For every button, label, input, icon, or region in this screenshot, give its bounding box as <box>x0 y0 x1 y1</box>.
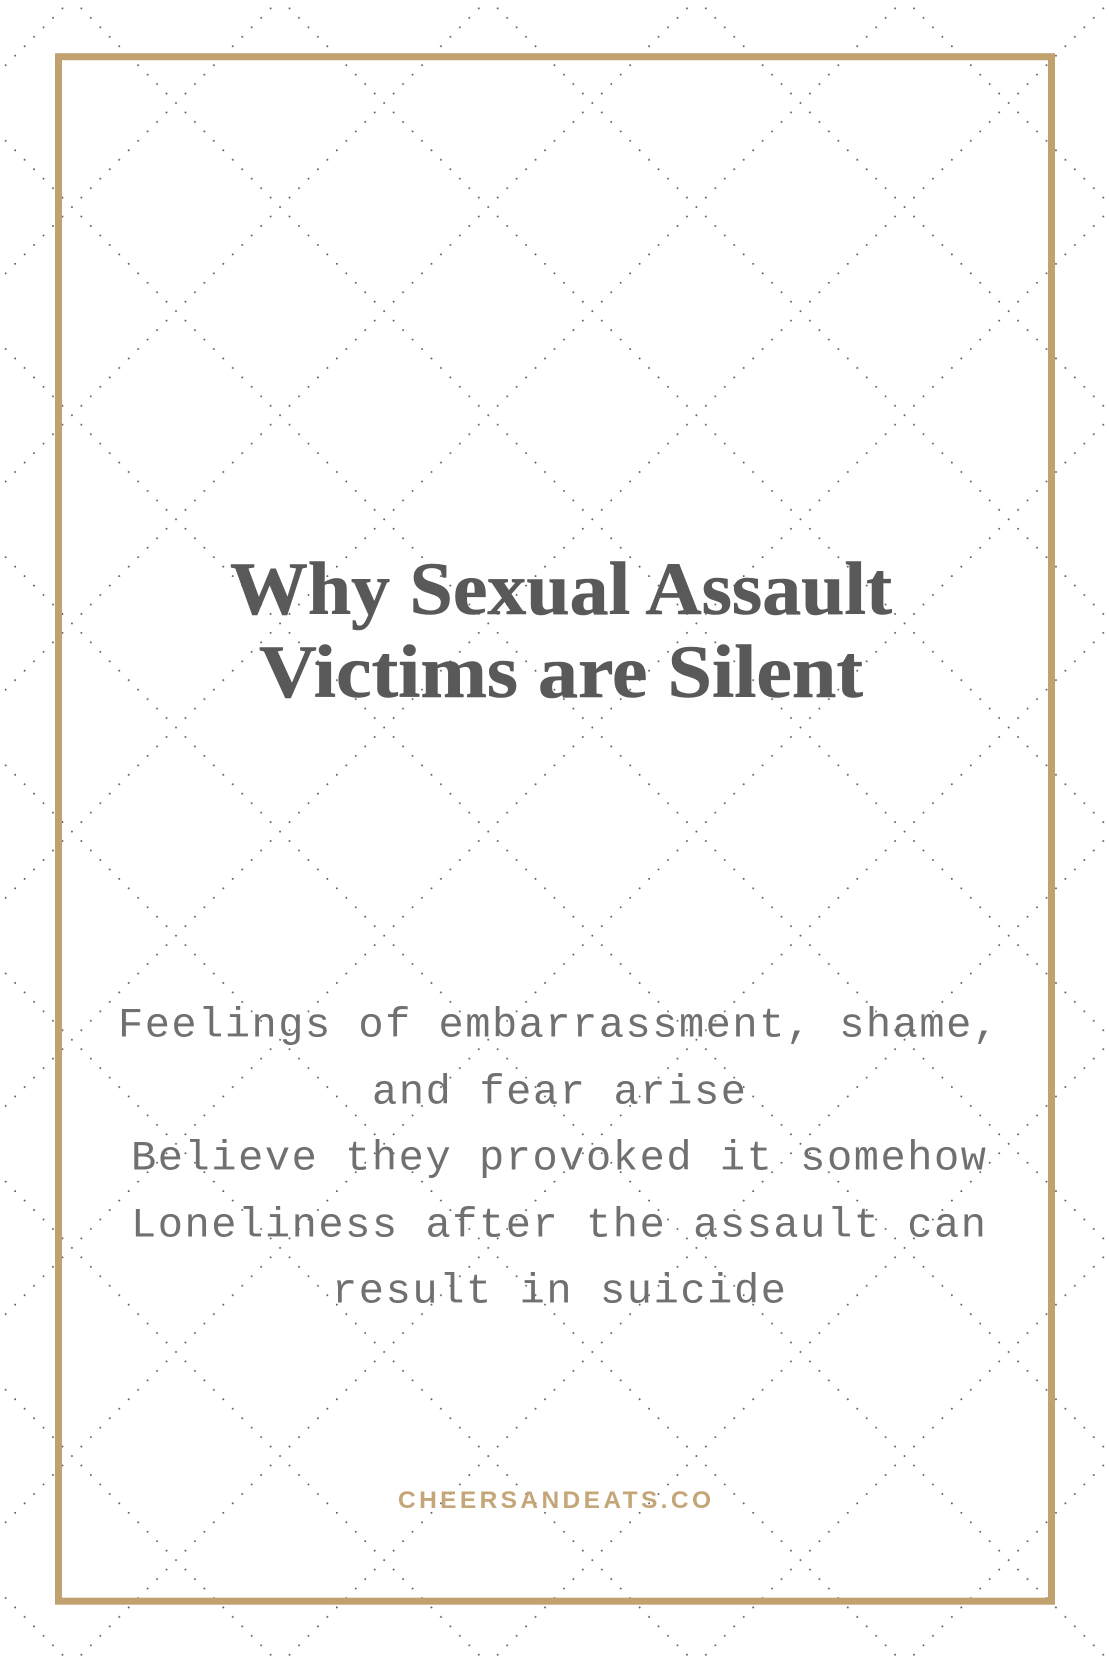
body line 2: and fear arise <box>372 1068 746 1116</box>
body line 1: Feelings of embarrassment, shame, <box>118 1002 998 1050</box>
title line 1: Why Sexual Assault <box>230 548 892 631</box>
title <box>230 548 892 714</box>
body line 3: Believe they provoked it somehow <box>131 1134 986 1182</box>
body line 5: result in suicide <box>332 1268 786 1316</box>
title line 2: Victims are Silent <box>259 631 863 714</box>
body line 4: Loneliness after the assault can <box>131 1202 986 1250</box>
footer website credit: CHEERSANDEATS.CO <box>398 1487 711 1514</box>
body text: reasons for silence <box>118 1002 998 1316</box>
